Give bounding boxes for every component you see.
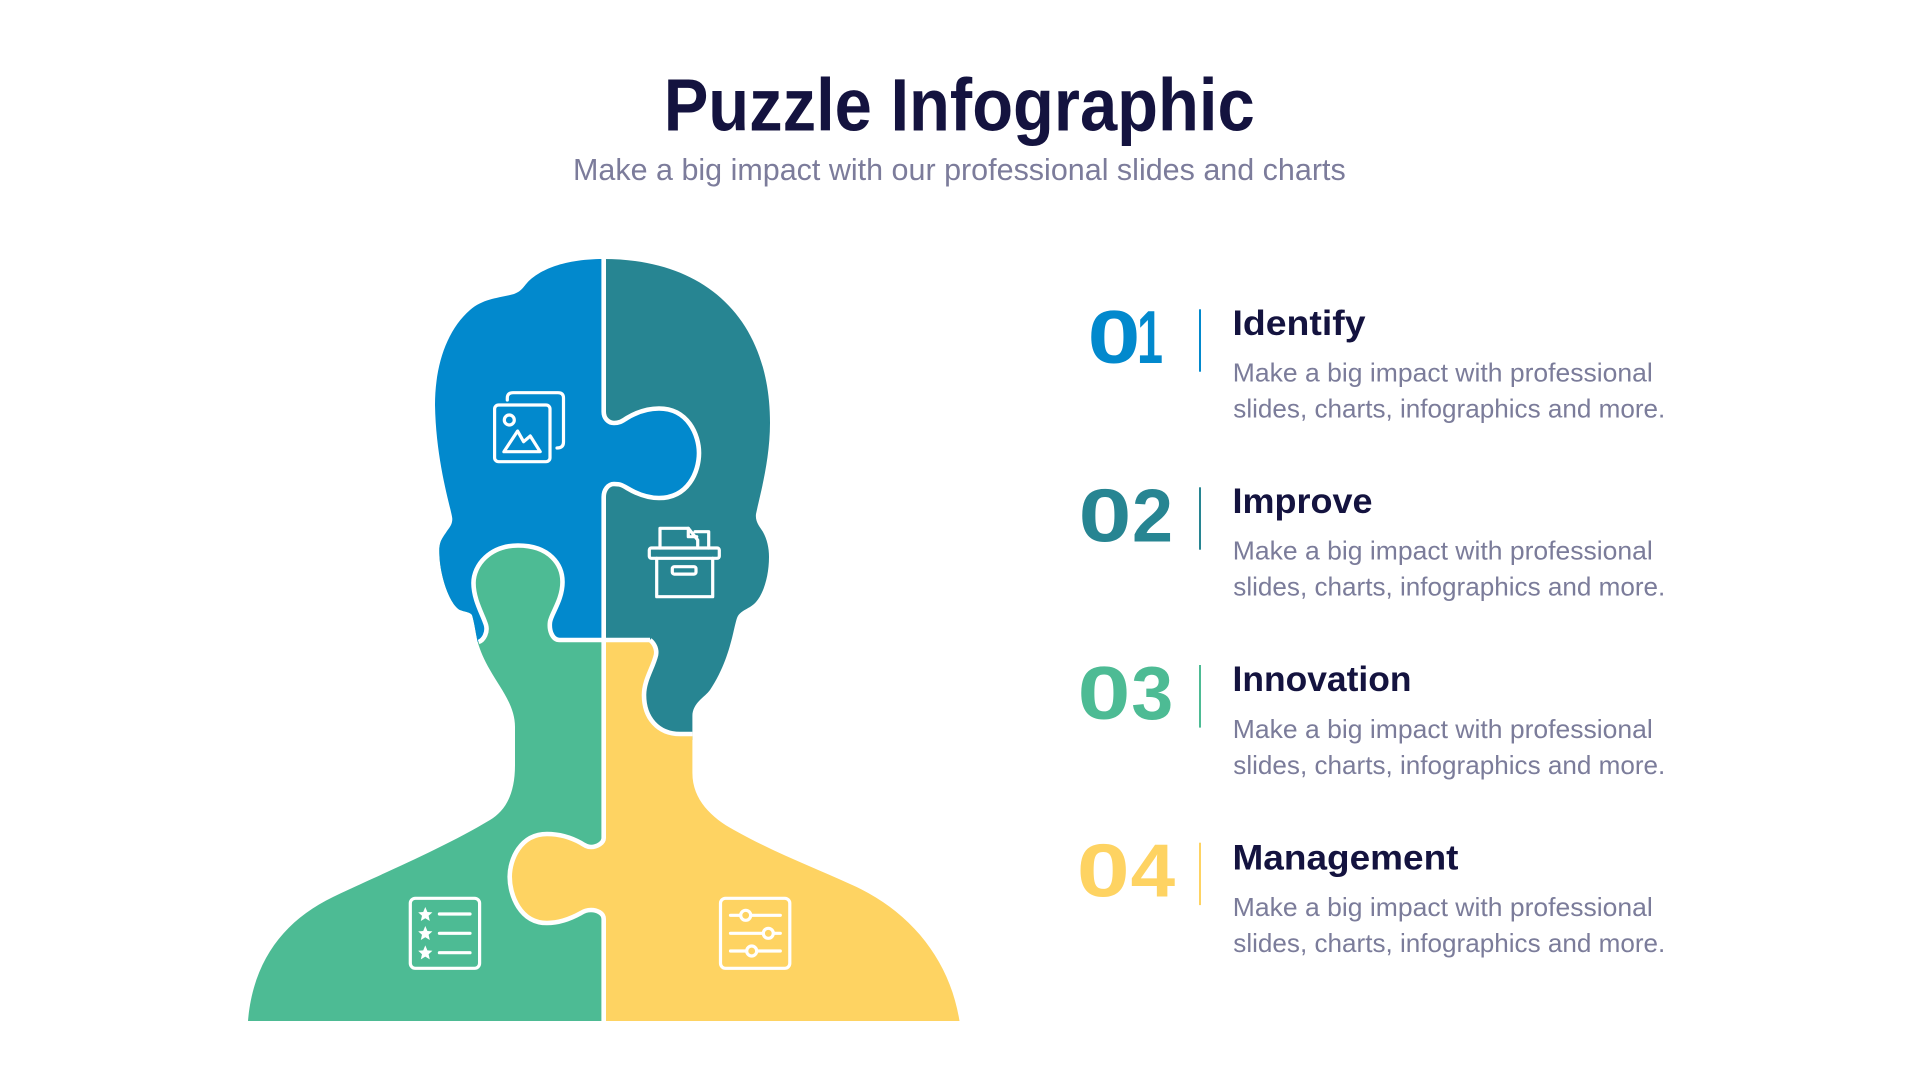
description 02: slides, charts, infographics and more. [1233,572,1665,602]
description 02: Make a big impact with professional [1233,536,1653,566]
icon: pictures [495,393,564,462]
description 04: slides, charts, infographics and more. [1233,928,1665,958]
item 04: Management [1077,829,1665,958]
number 01: 0 [1088,295,1140,379]
number 02: 0 [1078,473,1132,557]
description 03 [1233,714,1665,780]
number 03: 0 [1078,651,1130,735]
number 03: 3 [1131,651,1173,735]
description 01: Make a big impact with professional [1233,358,1653,388]
title: Puzzle Infographic [664,64,1255,147]
number 04: 4 [1131,829,1176,913]
item 02: Improve [1078,473,1665,602]
description 03: slides, charts, infographics and more. [1233,750,1665,780]
divider 01 [1199,309,1201,372]
piece: yellow bottom right [510,640,965,1025]
heading: Identify: Identify [1232,304,1366,343]
piece: blue top left [430,255,699,642]
description 02 [1233,536,1665,602]
piece: green bottom left [240,540,604,1025]
divider 02 [1199,487,1201,550]
puzzle head silhouette [240,255,965,1025]
icon: star checklist [410,898,480,968]
heading: Innovation: Innovation [1232,660,1412,699]
description 01: slides, charts, infographics and more. [1233,394,1665,424]
number 02: 2 [1132,473,1173,557]
description 01 [1233,358,1665,424]
description 04 [1233,892,1665,958]
piece outlines [474,255,699,1025]
description 04: Make a big impact with professional [1233,892,1653,922]
piece: teal top right [604,255,775,740]
icon: archive box [649,528,719,597]
puzzle pieces [240,255,965,1025]
divider 03 [1199,665,1201,728]
description 03: Make a big impact with professional [1233,714,1653,744]
number 04: 0 [1077,829,1130,913]
item 01: Identify [1088,295,1665,424]
subtitle: Make a big impact with our professional slides and charts [573,152,1346,187]
icon: sliders [720,898,790,968]
heading: Improve: Improve [1232,482,1372,521]
item 03: Innovation [1078,651,1665,780]
number 01: 1 [1137,295,1163,379]
divider 04 [1199,843,1201,905]
heading: Management: Management [1232,838,1459,877]
